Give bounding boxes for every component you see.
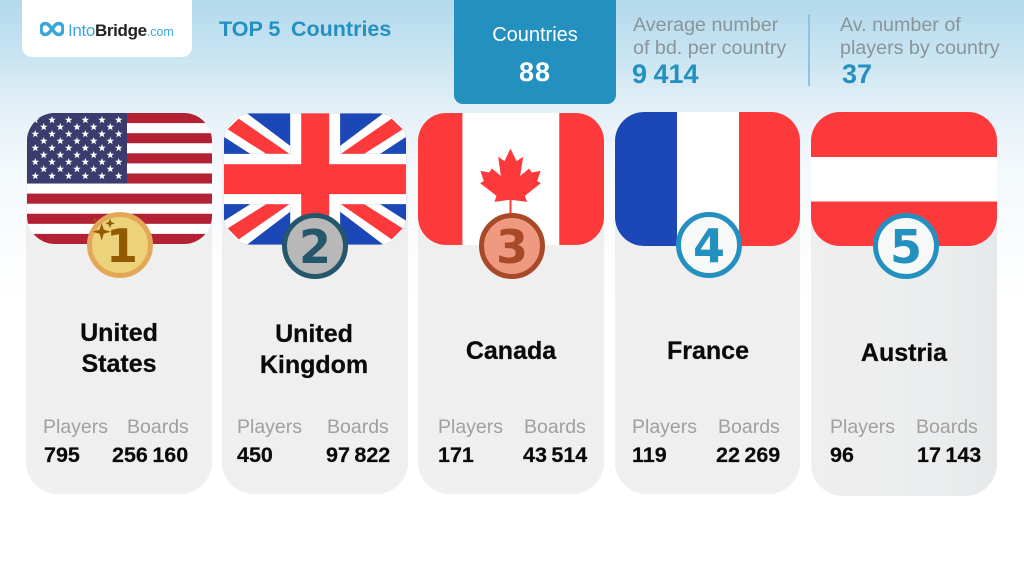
card background bbox=[811, 112, 997, 496]
stat label bbox=[633, 14, 786, 59]
country name: United bbox=[275, 320, 353, 348]
icon: medal 4 bbox=[676, 212, 742, 278]
stat label: Countries bbox=[492, 24, 578, 46]
stat panel: countries bbox=[454, 0, 616, 104]
players label: Players bbox=[43, 416, 108, 438]
icon: bronze medal 3 bbox=[479, 213, 545, 279]
stat value: 37 bbox=[842, 59, 872, 89]
players value: 96 bbox=[830, 443, 854, 467]
country name bbox=[260, 320, 368, 379]
boards value: 256 160 bbox=[112, 443, 188, 467]
boards label: Boards bbox=[718, 416, 780, 438]
players label: Players bbox=[632, 416, 697, 438]
players value: 450 bbox=[237, 443, 273, 467]
players value: 171 bbox=[438, 443, 474, 467]
boards value: 43 514 bbox=[523, 443, 587, 467]
boards label: Boards bbox=[127, 416, 189, 438]
logo panel bbox=[22, 0, 192, 57]
icon: medal 5: 5 bbox=[890, 220, 922, 274]
card background bbox=[222, 113, 408, 494]
players value: 119 bbox=[632, 443, 667, 467]
panel: United Kingdom bbox=[222, 113, 408, 494]
panel: Canada bbox=[418, 113, 604, 494]
icon: UK flag bbox=[224, 113, 406, 245]
title part: TOP 5: TOP 5 bbox=[219, 17, 280, 41]
country name: States bbox=[81, 350, 157, 378]
players label: Players bbox=[830, 416, 895, 438]
boards value: 17 143 bbox=[917, 443, 981, 467]
boards label: Boards bbox=[327, 416, 389, 438]
icon: gold medal 1 bbox=[87, 212, 153, 278]
boards value: 97 822 bbox=[326, 443, 390, 467]
stat label: Av. number of bbox=[840, 14, 961, 36]
icon: silver medal 2 bbox=[282, 213, 348, 279]
icon: medal 5 bbox=[873, 213, 939, 279]
logo wordmark: IntoBridge.com bbox=[68, 21, 174, 40]
players label: Players bbox=[438, 416, 503, 438]
stat label: of bd. per country bbox=[633, 37, 786, 59]
card background bbox=[418, 113, 604, 494]
title bbox=[219, 17, 391, 41]
country name: Canada bbox=[466, 337, 556, 365]
boards label: Boards bbox=[916, 416, 978, 438]
country name: France bbox=[667, 337, 749, 365]
card background bbox=[26, 113, 212, 494]
stat: average players by country bbox=[840, 14, 1000, 89]
boards value: 22 269 bbox=[716, 443, 780, 467]
players label: Players bbox=[237, 416, 302, 438]
stat label: Average number bbox=[633, 14, 778, 36]
card background bbox=[615, 112, 800, 494]
icon: infinity logo bbox=[40, 22, 64, 36]
icon: silver medal 2: 2 bbox=[299, 220, 331, 274]
icon: Canada flag bbox=[418, 113, 604, 245]
country name: Austria bbox=[861, 339, 947, 367]
panel: France bbox=[615, 112, 800, 494]
icon: US flag bbox=[27, 113, 212, 244]
icon: bronze medal 3: 3 bbox=[496, 220, 528, 274]
icon: France flag bbox=[615, 112, 800, 246]
stat label bbox=[840, 14, 1000, 59]
country name: United bbox=[80, 319, 158, 347]
icon: gold medal 1: 1 bbox=[106, 219, 138, 273]
icon: medal 4: 4 bbox=[693, 219, 725, 273]
stat: average boards per country bbox=[632, 14, 786, 89]
panel: Austria bbox=[811, 112, 997, 496]
panel: United States bbox=[26, 113, 212, 494]
stat value: 88 bbox=[519, 57, 551, 87]
divider bbox=[808, 14, 810, 86]
country name: Kingdom bbox=[260, 351, 368, 379]
icon: Austria flag bbox=[811, 112, 997, 246]
country name bbox=[80, 319, 158, 378]
boards label: Boards bbox=[524, 416, 586, 438]
stat value: 9 414 bbox=[632, 59, 699, 89]
title part: Countries: Countries bbox=[291, 17, 391, 41]
players value: 795 bbox=[44, 443, 80, 467]
stat label: players by country bbox=[840, 37, 1000, 59]
